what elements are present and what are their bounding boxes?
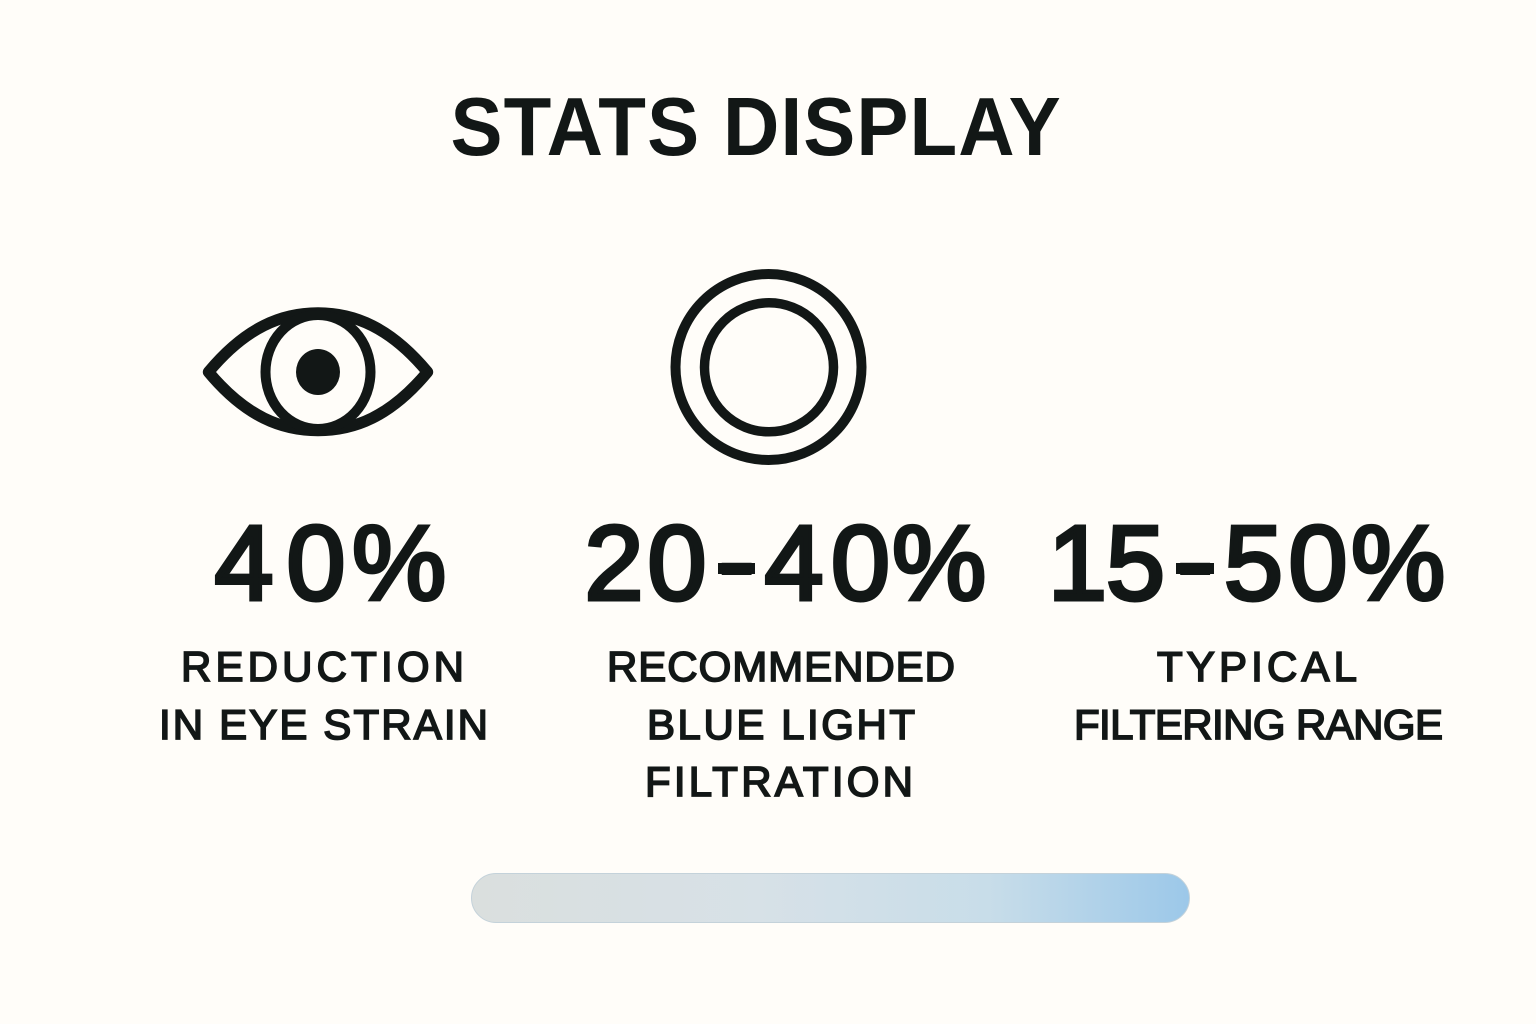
value: 20-40%: 20-40% [584,502,986,622]
label: reduction in eye strain: IN EYE STRAIN [159,701,488,748]
title: STATS DISPLAY [451,81,1061,174]
label: recommended blue light filtration: FILTRATION [645,758,913,805]
value: 15-50%: 15-50% [1048,502,1445,622]
label: recommended blue light filtration: RECOMMENDED [607,643,955,690]
label: typical filtering range: FILTERING RANGE [1074,701,1443,748]
label: reduction in eye strain [159,643,488,748]
stat: 15-50% typical filtering range [1048,502,1445,748]
value: 40%: 40% [214,504,446,622]
stat: 40% reduction in eye strain [159,504,488,748]
label: typical filtering range [1074,643,1443,748]
gradient filter bar [472,874,1190,922]
label: recommended blue light filtration: BLUE LIGHT [647,701,915,748]
label: reduction in eye strain: REDUCTION [181,643,464,690]
stat: 20-40% recommended blue light filtration [584,502,986,805]
icon: eye [208,313,428,430]
label: typical filtering range: TYPICAL [1157,643,1357,690]
icon: concentric lens circles [676,274,862,460]
label: recommended blue light filtration [607,643,955,805]
